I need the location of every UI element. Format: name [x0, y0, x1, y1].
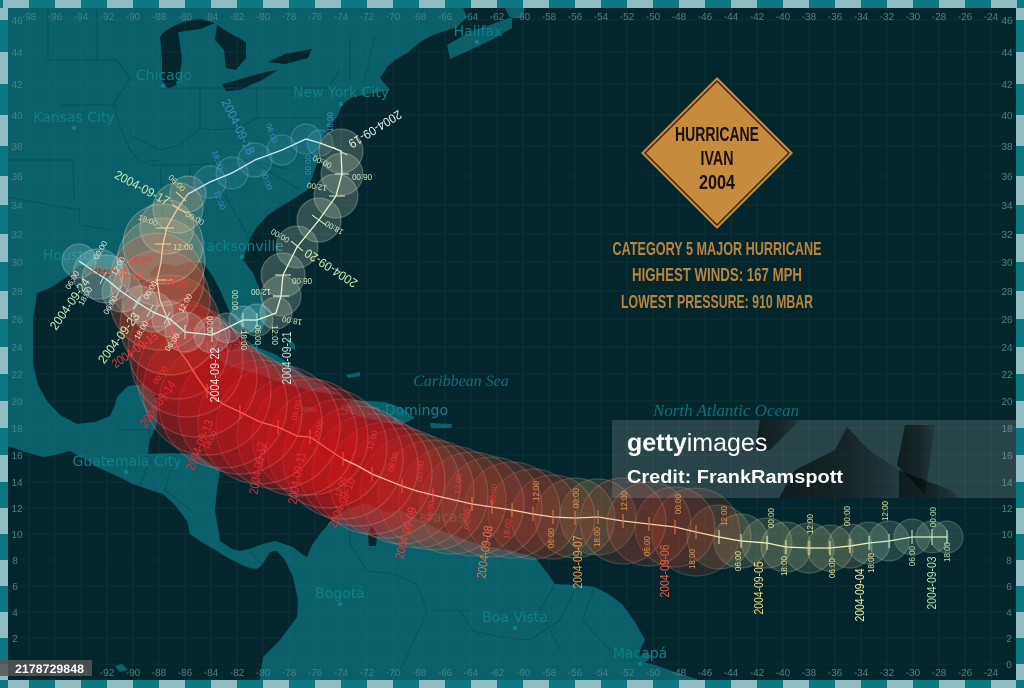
time labels: 00:00: [165, 277, 189, 289]
time labels: 00:00: [488, 483, 499, 504]
city and sea labels: Houston: [43, 248, 101, 264]
date labels: 2004-09-13: [184, 418, 216, 472]
longitude axis bottom: -52: [620, 668, 635, 679]
longitude axis top: -98: [22, 12, 37, 23]
time labels: 12:00: [532, 480, 541, 501]
time labels: 00:00: [269, 226, 291, 244]
longitude axis top: -78: [282, 12, 297, 23]
time labels: 06:00: [291, 276, 312, 285]
latitude axis right: 18: [1001, 424, 1013, 435]
city and sea labels: Caribbean Sea: [413, 373, 509, 390]
longitude axis top: -50: [646, 12, 661, 23]
latitude axis left: 6: [12, 582, 18, 593]
longitude axis top: -72: [360, 12, 375, 23]
date labels: 2004-09-06: [658, 544, 672, 598]
latitude axis right: 20: [1001, 397, 1013, 408]
latitude axis right: 32: [1001, 230, 1013, 241]
time labels: 00:00: [311, 153, 333, 170]
latitude axis right: 26: [1001, 315, 1013, 326]
time labels: 18:00: [593, 526, 602, 547]
time labels: 00:00: [415, 460, 426, 481]
longitude axis top: -52: [620, 12, 635, 23]
time labels: 18:00: [239, 330, 248, 351]
latitude axis right: 24: [1001, 343, 1013, 354]
latitude axis left: 14: [11, 478, 23, 489]
longitude axis bottom: -70: [386, 668, 401, 679]
latitude axis left: 16: [11, 451, 23, 462]
time labels: 06:00: [64, 269, 82, 291]
longitude axis top: -32: [880, 12, 895, 23]
latitude axis right: 12: [1001, 504, 1013, 515]
longitude axis top: -58: [542, 12, 557, 23]
city and sea labels: [33, 24, 799, 666]
longitude axis bottom: -42: [750, 668, 765, 679]
latitude axis left: 30: [11, 258, 23, 269]
great lakes: [160, 19, 377, 546]
latitude axis right: 42: [1001, 80, 1013, 91]
longitude axis top: -38: [802, 12, 817, 23]
time labels: 00:00: [142, 279, 160, 301]
longitude axis top: -60: [516, 12, 531, 23]
date labels: 2004-09-21: [280, 331, 294, 384]
date labels: 2004-09-05: [752, 561, 766, 614]
longitude axis bottom: -78: [282, 668, 297, 679]
longitude axis top: -30: [906, 12, 921, 23]
warning sign: hurricane ivan 2004: 2004: [699, 172, 736, 194]
time labels: 12:00: [110, 255, 128, 277]
longitude axis bottom: -24: [984, 668, 999, 679]
city and sea labels: Kansas City: [33, 110, 115, 126]
warning sign: hurricane ivan 2004: HURRICANE: [675, 124, 759, 146]
longitude axis bottom: -46: [698, 668, 713, 679]
time labels: 12:00: [306, 180, 328, 193]
latitude axis left: 28: [11, 287, 23, 298]
longitude axis top: -40: [776, 12, 791, 23]
time labels: 18:00: [133, 319, 151, 341]
latitude axis left: 36: [11, 172, 23, 183]
city and sea labels: Boa Vista: [482, 610, 548, 626]
time labels: 18:00: [210, 149, 225, 172]
latitude axis left: 2: [12, 634, 18, 645]
latitude axis left: 42: [11, 80, 23, 91]
latitude axis left: 22: [11, 370, 23, 381]
latitude axis right: 34: [1001, 201, 1013, 212]
date labels: 2004-09-20: [302, 246, 360, 290]
longitude axis bottom: -28: [932, 668, 947, 679]
time labels: 18:00: [688, 548, 697, 569]
time labels: 06:00: [387, 451, 401, 473]
city and sea labels: Halifax: [454, 24, 502, 40]
longitude axis bottom: -54: [594, 668, 609, 679]
latitude axis left: 46: [11, 16, 23, 27]
time labels: 12:00: [720, 505, 729, 526]
longitude axis top: -54: [594, 12, 609, 23]
longitude axis top: -46: [698, 12, 713, 23]
time labels: 12:00: [177, 292, 195, 314]
date labels: 2004-09-24: [47, 275, 93, 333]
latitude axis right: [1001, 16, 1013, 671]
longitude axis bottom: -74: [334, 668, 349, 679]
longitude axis top: -66: [438, 12, 453, 23]
latitude axis left: 26: [11, 315, 23, 326]
time labels: 12:00: [366, 429, 380, 451]
time labels: 06:00: [643, 535, 652, 556]
longitude axis top: -74: [334, 12, 349, 23]
city and sea labels: Santo Domingo: [340, 403, 448, 419]
longitude axis top: -48: [672, 12, 687, 23]
time labels: 06:00: [734, 550, 743, 571]
longitude axis bottom: -72: [360, 668, 375, 679]
time labels: 06:00: [828, 557, 837, 578]
date labels: 2004-09-03: [925, 556, 939, 610]
longitude axis top: -76: [308, 12, 323, 23]
time labels: 00:00: [674, 493, 683, 514]
longitude axis bottom: -32: [880, 668, 895, 679]
latitude axis right: 2: [1006, 634, 1012, 645]
city and sea labels: Guatemala City: [73, 454, 181, 470]
time labels: 18:00: [323, 218, 345, 236]
longitude axis top: -82: [230, 12, 245, 23]
latitude axis left: 44: [11, 48, 23, 59]
time labels: 06:00: [163, 331, 182, 353]
longitude axis top: -34: [854, 12, 869, 23]
longitude axis bottom: -84: [204, 668, 219, 679]
city and sea labels: New York City: [293, 85, 389, 101]
time labels: 18:00: [281, 314, 303, 327]
latitude axis right: 40: [1001, 111, 1013, 122]
longitude axis bottom: -60: [516, 668, 531, 679]
longitude axis top: -68: [412, 12, 427, 23]
longitude axis top: -26: [958, 12, 973, 23]
time labels: 18:00: [780, 555, 789, 576]
longitude axis bottom: -26: [958, 668, 973, 679]
time labels: 00:00: [205, 316, 214, 337]
latitude axis right: 22: [1001, 370, 1013, 381]
date labels: [47, 97, 939, 621]
watermark band: Credit: FrankRamspott: [627, 467, 843, 487]
date labels: 2004-09-23: [95, 310, 143, 366]
latitude axis left: 32: [11, 230, 23, 241]
latitude axis left: 40: [11, 111, 23, 122]
date labels: 2004-09-10: [326, 476, 358, 530]
time labels: 06:00: [462, 508, 473, 529]
date labels: 2004-09-14: [137, 378, 179, 430]
time labels: 00:00: [312, 419, 326, 441]
longitude axis top: -88: [152, 12, 167, 23]
longitude axis bottom: -64: [464, 668, 479, 679]
longitude axis bottom: -62: [490, 668, 505, 679]
time labels: 06:00: [908, 545, 917, 566]
latitude axis left: 10: [11, 530, 23, 541]
time labels: 06:00: [547, 527, 556, 548]
time labels: 18:00: [943, 541, 952, 562]
latitude axis left: 34: [11, 201, 23, 212]
time labels: 00:00: [767, 507, 776, 528]
watermark band: [612, 420, 1016, 498]
longitude axis bottom: -98: [22, 668, 37, 679]
city and sea labels: Bogotá: [315, 586, 365, 602]
date labels: 2004-09-09: [392, 506, 420, 560]
city and sea labels: Macapá: [613, 646, 667, 662]
warning sign: hurricane ivan 2004: IVAN: [700, 148, 734, 170]
longitude axis bottom: -96: [48, 668, 63, 679]
latitude axis left: 8: [12, 556, 18, 567]
latitude axis left: 12: [11, 504, 23, 515]
map: land masses: [8, 8, 699, 680]
time labels: 00:00: [92, 239, 110, 261]
time labels: 12:00: [173, 243, 194, 252]
longitude axis top: -84: [204, 12, 219, 23]
date labels: 2004-09-18: [219, 97, 257, 157]
longitude axis bottom: -68: [412, 668, 427, 679]
city and sea labels: Jacksonville: [201, 239, 284, 255]
longitude axis bottom: -36: [828, 668, 843, 679]
date labels: 2004-09-17: [112, 168, 172, 208]
longitude axis top: -28: [932, 12, 947, 23]
latitude axis right: 30: [1001, 258, 1013, 269]
image id tag: [0, 660, 92, 676]
longitude axis bottom: -94: [74, 668, 89, 679]
time labels: [64, 111, 952, 578]
longitude axis top: -42: [750, 12, 765, 23]
time labels: 18:00: [137, 213, 159, 228]
longitude axis bottom: -76: [308, 668, 323, 679]
longitude axis top: -70: [386, 12, 401, 23]
time labels: 12:00: [453, 473, 464, 494]
latitude axis right: 44: [1001, 48, 1013, 59]
longitude axis bottom: -86: [178, 668, 193, 679]
longitude axis top: -62: [490, 12, 505, 23]
time labels: 06:00: [253, 325, 262, 346]
date labels: 2004-09-12: [247, 441, 270, 495]
city and sea labels: Havana: [205, 340, 259, 356]
time labels: 00:00: [303, 155, 312, 176]
time labels: 18:00: [425, 500, 436, 521]
date labels: 2004-09-08: [474, 525, 496, 579]
city and sea labels: Caracas: [409, 510, 465, 526]
time labels: 00:00: [259, 169, 274, 192]
time labels: 00:00: [184, 210, 206, 228]
storm statistics text: [612, 238, 822, 312]
time labels: 18:00: [77, 285, 95, 307]
latitude axis right: 38: [1001, 142, 1013, 153]
longitude axis top: -86: [178, 12, 193, 23]
latitude axis right: 0: [1006, 660, 1012, 671]
time labels: 12:00: [212, 189, 227, 212]
storm statistics text: HIGHEST WINDS: 167 MPH: [632, 264, 802, 285]
latitude axis left: 20: [11, 397, 23, 408]
date labels: 2004-09-19: [346, 107, 404, 151]
time labels: 00:00: [929, 506, 938, 527]
city and sea labels: Chicago: [136, 68, 192, 84]
longitude axis bottom: -30: [906, 668, 921, 679]
borders: [8, 8, 610, 680]
latitude axis right: 8: [1006, 556, 1012, 567]
longitude axis bottom: -44: [724, 668, 739, 679]
latitude axis left: 18: [11, 424, 23, 435]
time labels: 00:00: [572, 487, 581, 508]
time labels: 18:00: [334, 476, 348, 498]
longitude axis top: -24: [984, 12, 999, 23]
time labels: 00:00: [151, 364, 170, 386]
time labels: 06:00: [290, 399, 304, 421]
track time ticks: [100, 147, 947, 555]
latitude axis left: 38: [11, 142, 23, 153]
latitude axis right: 10: [1001, 530, 1013, 541]
time labels: 18:00: [502, 518, 513, 539]
longitude axis bottom: -58: [542, 668, 557, 679]
longitude axis bottom: -40: [776, 668, 791, 679]
longitude axis bottom: -50: [646, 668, 661, 679]
date labels: 2004-09-11: [286, 451, 309, 505]
latitude axis right: 14: [1001, 478, 1013, 489]
date labels: 2004-09-04: [853, 568, 867, 622]
storm track line: [79, 139, 947, 548]
longitude axis top: -64: [464, 12, 479, 23]
time labels: 00:00: [843, 505, 852, 526]
longitude axis bottom: -90: [126, 668, 141, 679]
time labels: 12:00: [270, 325, 279, 346]
longitude axis bottom: -92: [100, 668, 115, 679]
date labels: 2004-09-15: [109, 329, 161, 371]
longitude axis top: -94: [74, 12, 89, 23]
time labels: 12:00: [881, 500, 890, 521]
storm wind radius circles: [62, 124, 963, 576]
time labels: 06:00: [264, 122, 279, 145]
latitude axis right: 36: [1001, 172, 1013, 183]
longitude axis top: -44: [724, 12, 739, 23]
longitude axis top: -90: [126, 12, 141, 23]
time labels: 18:00: [326, 111, 335, 132]
longitude axis bottom: -56: [568, 668, 583, 679]
time labels: 12:00: [175, 291, 193, 313]
longitude axis bottom: -88: [152, 668, 167, 679]
time labels: 18:00: [202, 429, 220, 451]
longitude axis bottom: -38: [802, 668, 817, 679]
longitude axis bottom: -80: [256, 668, 271, 679]
image id tag: 2178729848: [15, 662, 84, 676]
longitude axis bottom: -48: [672, 668, 687, 679]
time labels: 12:00: [620, 490, 629, 511]
time labels: 06:00: [166, 173, 187, 194]
longitude axis top: -96: [48, 12, 63, 23]
longitude axis top: -92: [100, 12, 115, 23]
longitude axis bottom: [22, 668, 999, 679]
latitude axis left: [11, 16, 23, 645]
longitude axis bottom: -34: [854, 668, 869, 679]
latitude axis left: 24: [11, 343, 23, 354]
time labels: 06:00: [351, 172, 372, 181]
time labels: 06:00: [129, 255, 151, 265]
storm statistics text: LOWEST PRESSURE: 910 MBAR: [621, 291, 813, 312]
latitude axis right: 6: [1006, 582, 1012, 593]
time labels: 18:00: [867, 552, 876, 573]
date labels: 2004-09-16: [90, 262, 144, 284]
latitude axis right: 28: [1001, 287, 1013, 298]
time labels: 06:00: [102, 294, 120, 316]
time labels: 12:00: [250, 287, 271, 296]
watermark band: gettyimages: [627, 429, 767, 457]
latitude axis left: 4: [12, 608, 18, 619]
latitude axis right: 16: [1001, 451, 1013, 462]
longitude axis bottom: -82: [230, 668, 245, 679]
date labels: 2004-09-22: [208, 347, 222, 402]
longitude axis top: -36: [828, 12, 843, 23]
time labels: 12:00: [806, 513, 815, 534]
city and sea labels: North Atlantic Ocean: [652, 401, 799, 420]
time labels: 12:00: [256, 444, 270, 466]
longitude axis top: [22, 12, 999, 23]
latitude axis right: 4: [1006, 608, 1012, 619]
time labels: 00:00: [230, 290, 239, 311]
date labels: 2004-09-07: [571, 535, 585, 588]
longitude axis top: -56: [568, 12, 583, 23]
storm statistics text: CATEGORY 5 MAJOR HURRICANE: [612, 238, 822, 259]
longitude axis top: -80: [256, 12, 271, 23]
latitude axis right: 46: [1001, 16, 1013, 27]
longitude axis bottom: -66: [438, 668, 453, 679]
warning sign: hurricane ivan 2004: [641, 77, 793, 229]
